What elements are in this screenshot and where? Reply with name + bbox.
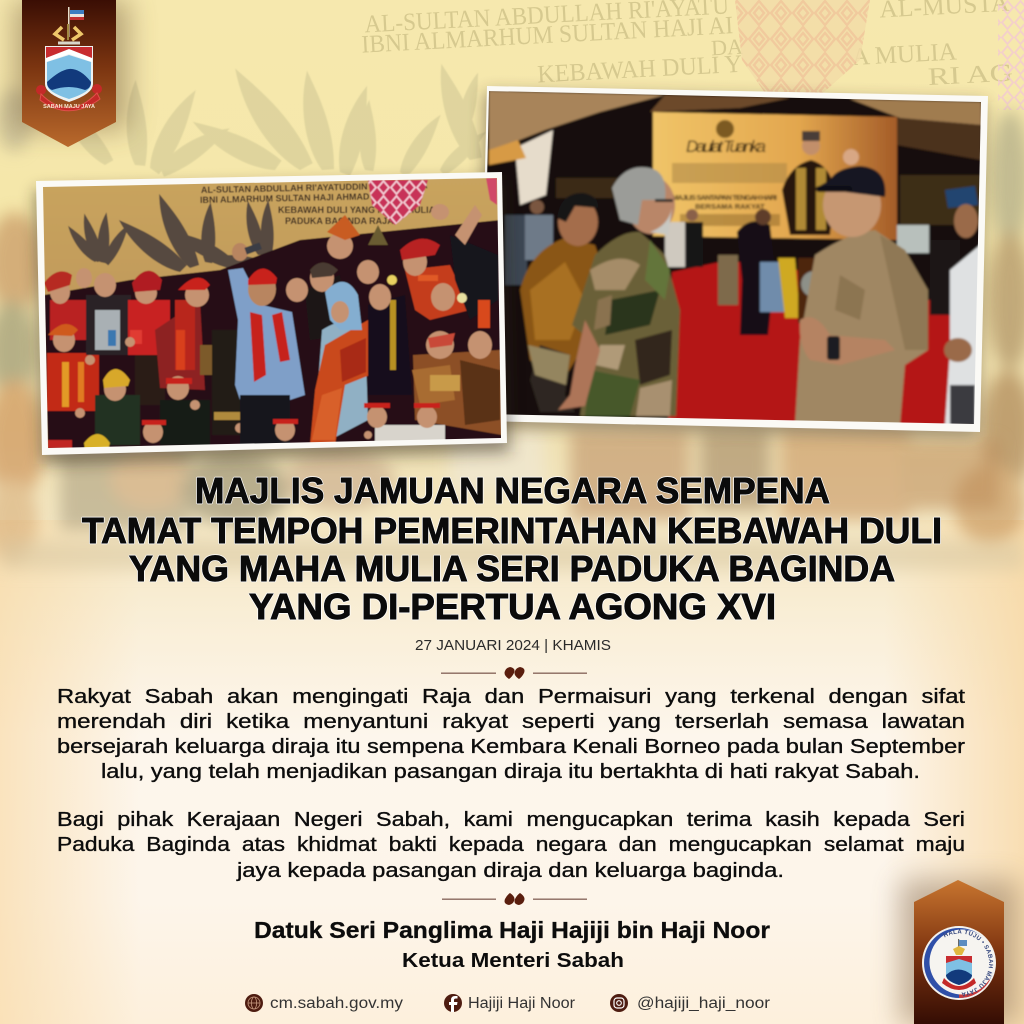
ghost backdrop text: KEBAWAH DULI Y [537,51,743,88]
stage backdrop: IBNI ALMARHUM SULTAN HAJI AHMAD SHAH [200,191,397,205]
title: MAJLIS JAMUAN NEGARA SEMPENA [195,470,830,511]
ghost right edge artwork [954,110,1024,545]
ghost backdrop text: RI AG [927,60,1014,91]
man in khaki shirt with cap [795,166,928,425]
photo left: crowd selfie [35,172,510,464]
tent ceiling [480,90,985,430]
stage backdrop: PADUKA BAGINDA RAJA [285,216,394,226]
stage backdrop: AL-SULTAN ABDULLAH RI'AYATUDDIN AL-MUSTAFA [201,180,428,195]
title: MAJLIS JAMUAN NEGARA SEMPENA [195,470,830,511]
title: YANG MAHA MULIA SERI PADUKA BAGINDA [129,548,895,589]
icon: shield [45,46,93,102]
icon: instagram [610,994,628,1012]
body paragraph 2: Bagi pihak Kerajaan Negeri Sabah, kami mengucapkan terima kasih kepada Seri [57,809,965,831]
stage backdrop: KEBAWAH DULI YANG MAHA MULIA [278,205,436,215]
icon: crest hands [55,24,81,43]
costume colour detail [48,275,490,448]
footer: facebook: Hajiji Haji Noor [468,995,575,1012]
event screen: BERSAMA RAKYAT [695,202,765,211]
title: YANG MAHA MULIA SERI PADUKA BAGINDA [129,548,895,589]
man in batik shirt [520,193,600,412]
ghost backdrop text: IBNI ALMARHUM SULTAN HAJI AI [361,12,734,59]
ghost feathers [55,57,493,181]
photo right: tent event [478,86,988,437]
icon: motto ribbon [36,84,102,111]
crowd bodies [44,220,502,450]
event screen [653,112,897,240]
ghost backdrop text: DA [711,34,744,60]
title: TAMAT TEMPOH PEMERINTAHAN KEBAWAH DULI [82,510,942,551]
icon: facebook [444,994,462,1012]
date: 27 JANUARI 2024 | KHAMIS [415,638,611,654]
faces and hats [50,204,492,443]
body paragraph 1: Rakyat Sabah akan mengingati Raja dan Permaisuri yang terkenal dengan sifat [57,686,966,708]
icon: globe [245,994,263,1012]
ghost batik patterns [735,0,1024,110]
ghost crowd band [0,430,1024,570]
body paragraph 2: Paduka Baginda atas khidmat bakti kepada negara dan mengucapkan selamat maju [57,834,965,856]
headdresses [44,205,482,450]
event screen: MAJLIS SANTAPAN TENGAH HARI [672,193,777,202]
stage backdrop [40,175,505,455]
icon: motto ribbon: SABAH MAJU JAYA [43,104,95,110]
feathers [68,194,274,272]
event screen: Daulat Tuanka [686,137,766,156]
background crowd [505,200,960,335]
footer: instagram: @hajiji_haji_noor [637,995,770,1012]
icon: Sabah flag [68,7,84,37]
title: YANG DI-PERTUA AGONG XVI [249,586,776,627]
signatory role: Ketua Menteri Sabah [402,950,624,972]
closing quote divider [442,893,587,905]
footer: website: cm.sabah.gov.my [270,995,403,1012]
title: YANG DI-PERTUA AGONG XVI [249,586,776,627]
bottom-right banner with seal [914,880,1004,1024]
body paragraph 1: bersejarah keluarga diraja itu sempena Kembara Kenali Borneo pada bulan September [57,736,965,758]
ghost left edge artwork [0,88,45,560]
seal badge [922,926,996,1000]
top-left banner with Sabah crest [22,0,116,147]
body paragraph 1: merendah diri ketika menyantuni rakyat seperti yang terserlah semasa lawatan [57,711,965,733]
signatory name: Datuk Seri Panglima Haji Hajiji bin Haji Noor [254,917,770,943]
opening quote divider [441,667,587,679]
man in camouflage [558,167,680,416]
selfie man in blue [228,242,305,445]
ghost backdrop text [360,0,1014,121]
body paragraph 1 [57,686,966,783]
body paragraph 2 [57,809,965,882]
title [82,470,942,627]
body paragraph 2: jaya kepada pasangan diraja dan keluarga baginda. [236,860,784,882]
ghost backdrop text: A MULIA [851,39,957,71]
title: TAMAT TEMPOH PEMERINTAHAN KEBAWAH DULI [82,510,942,551]
red carpet [668,262,981,425]
seal badge: HALA TUJU • SABAH MAJU JAYA [943,929,994,996]
ghost shadow behind lower banner [900,880,1018,1024]
ghost shadow under top banner [14,0,129,130]
body paragraph 1: lalu, yang telah menjadikan pasangan diraja itu bertakhta di hati rakyat Sabah. [101,761,920,783]
man far right [942,184,979,424]
